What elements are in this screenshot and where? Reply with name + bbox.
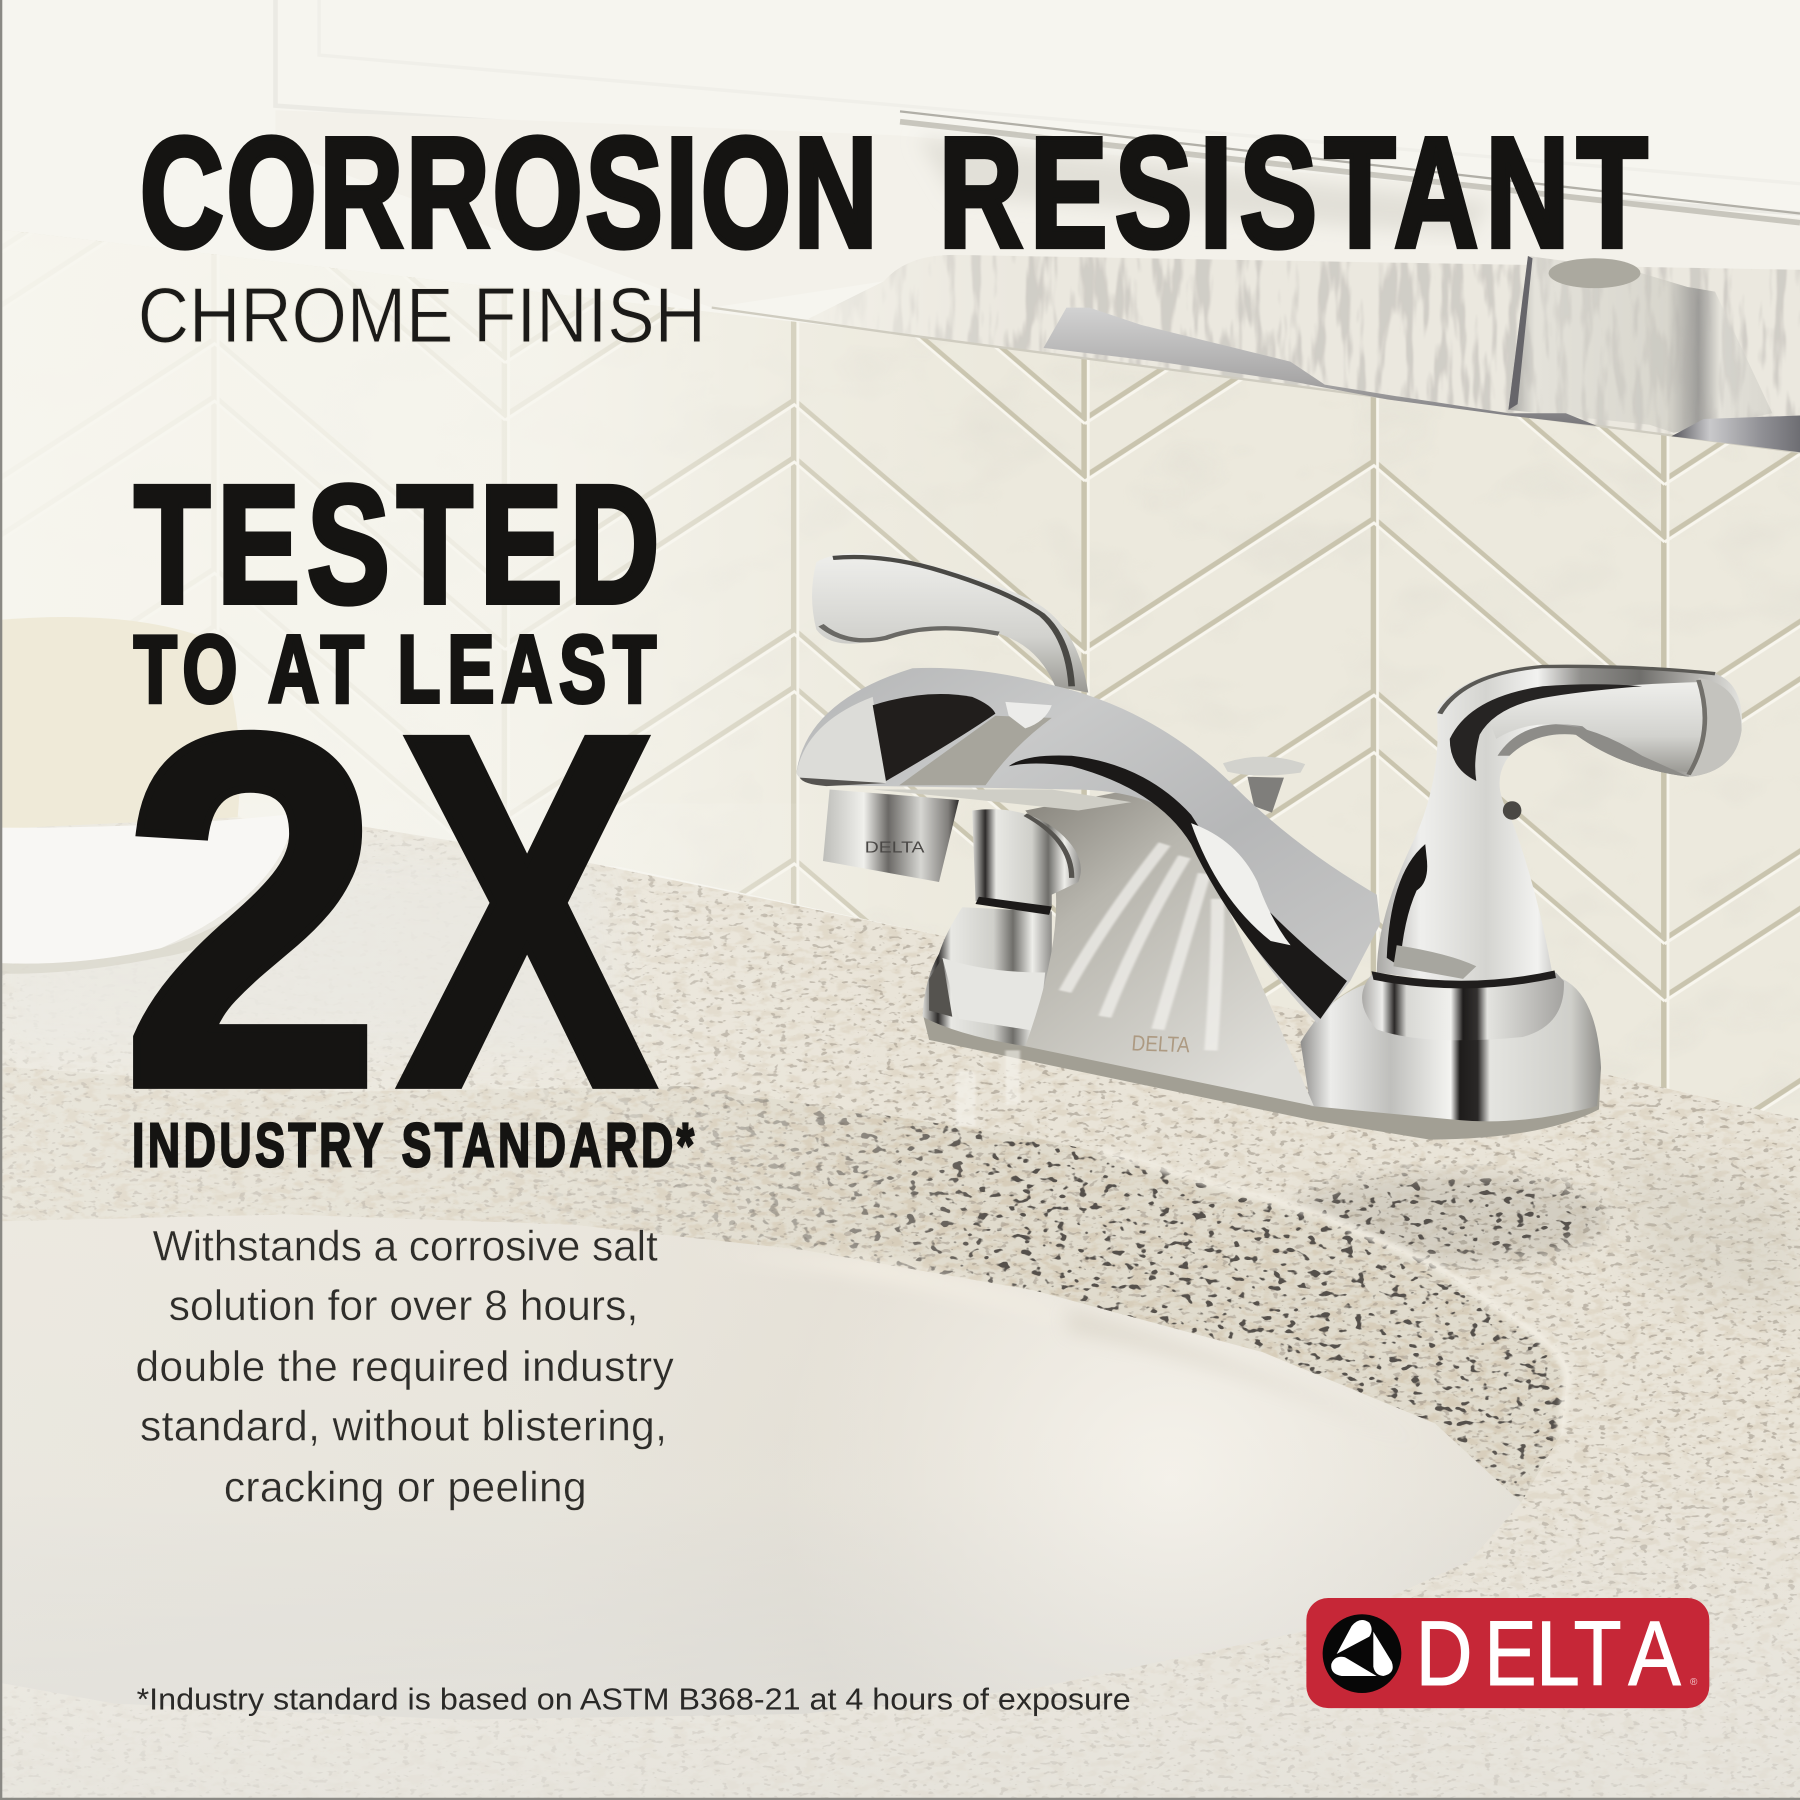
right handle — [1377, 665, 1742, 987]
spout dark reflection — [873, 694, 995, 781]
right base — [1301, 979, 1601, 1121]
logo wordmark: DELTA — [1416, 1603, 1681, 1705]
soap and dish — [0, 617, 295, 974]
countertop front edge — [2, 1067, 1566, 1502]
claim: tested to at least 2x — [121, 452, 694, 1192]
heading: corrosion resistant: RESISTANT — [939, 106, 1648, 280]
claim line: to at least: TO AT LEAST — [134, 616, 656, 722]
left base — [922, 907, 1052, 1046]
pop-up lift rod — [1223, 757, 1305, 813]
spout — [796, 668, 1380, 1023]
claim number: 2x: 2 — [121, 630, 382, 1192]
reflection: handle — [1043, 308, 1597, 426]
description text: solution for over 8 hours, — [169, 1282, 638, 1329]
faucet body logo text: DELTA — [1131, 1031, 1191, 1058]
claim number: 2x — [121, 630, 659, 1192]
subheading: chrome finish: CHROME FINISH — [138, 271, 706, 359]
heading: corrosion resistant — [140, 106, 1648, 280]
clear base gasket — [922, 1013, 1601, 1140]
claim number: 2x: X — [397, 630, 659, 1192]
aerator: DELTA — [865, 839, 925, 856]
granite countertop — [0, 792, 1800, 1800]
sink basin — [0, 1215, 1521, 1720]
left handle neck — [972, 809, 1081, 915]
description text: double the required industry — [135, 1343, 675, 1390]
icon: delta triangle mark — [1323, 1614, 1401, 1693]
description text — [135, 1222, 675, 1511]
heading: corrosion resistant: CORROSION — [140, 106, 877, 280]
bullnose highlight — [1102, 1151, 1567, 1434]
spout underside — [873, 789, 1131, 810]
wash overlays — [0, 804, 1800, 1800]
registered mark: ® — [1690, 1677, 1698, 1688]
description text: Withstands a corrosive salt — [153, 1222, 658, 1269]
faucet center body — [1025, 789, 1314, 1106]
footnote: *Industry standard is based on ASTM B368-21 at 4 hours of exposure — [137, 1681, 1131, 1716]
herringbone tile wall — [21, 232, 1800, 1119]
right collar — [1362, 970, 1564, 1040]
claim line: tested: TESTED — [134, 452, 659, 638]
rear handle — [812, 553, 1088, 693]
Delta logo badge — [1306, 1598, 1709, 1708]
spout side reflection — [1009, 755, 1347, 1019]
description text: standard, without blistering, — [140, 1403, 667, 1450]
counter reflections — [956, 1050, 1020, 1126]
faucet — [796, 553, 1742, 1140]
reflection: spout — [1504, 253, 1800, 452]
claim line: industry standard: INDUSTRY STANDARD* — [132, 1111, 694, 1180]
marble ledge with faucet reflection — [712, 247, 1800, 459]
aerator — [823, 789, 959, 882]
description text: cracking or peeling — [224, 1464, 587, 1511]
